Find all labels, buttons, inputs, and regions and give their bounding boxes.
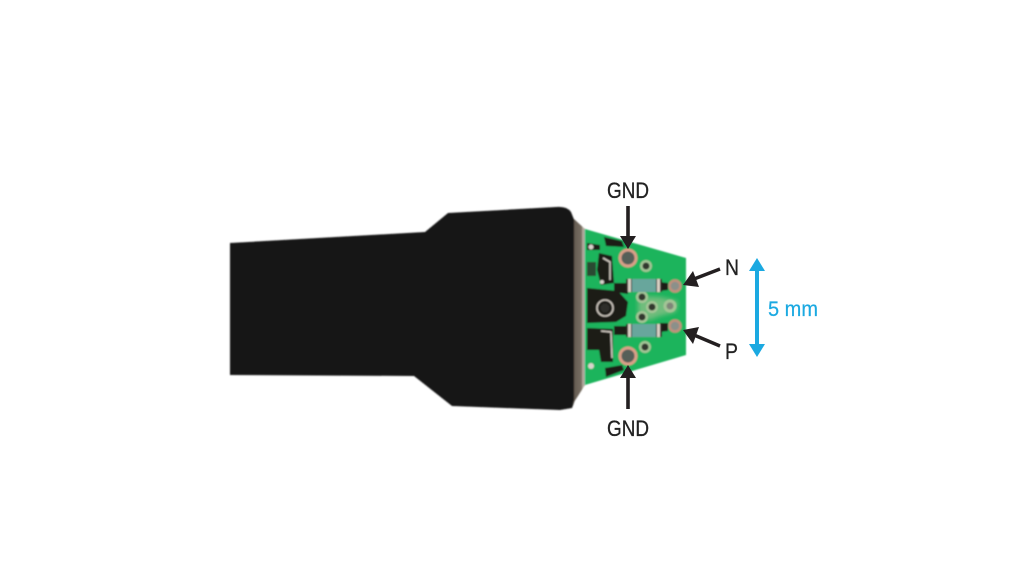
- metal collar: [572, 219, 585, 405]
- surface-mount components: [626, 279, 662, 337]
- black probe cable with heat-shrink sleeve: [230, 207, 585, 410]
- arrow: N: [683, 269, 720, 287]
- copper GND and signal pads: [620, 250, 680, 364]
- vias: [638, 262, 656, 350]
- label: 5 mm: 5 mm: [768, 298, 818, 321]
- label: N: N: [725, 255, 739, 280]
- label: P: P: [725, 339, 738, 364]
- light pads around the centre: [636, 260, 676, 353]
- arrow: GND top: [620, 206, 636, 249]
- arrow: P: [683, 327, 720, 346]
- label: GND top: GND: [607, 178, 649, 203]
- green circuit board: [585, 229, 686, 385]
- dark traces and solder: [587, 237, 668, 377]
- arrow: GND bottom: [620, 365, 636, 409]
- dimension arrow: 5 mm: [749, 258, 765, 357]
- label: GND bottom: GND: [607, 416, 649, 441]
- pale halo around centre vias: [638, 296, 678, 320]
- silver solder joints: [597, 258, 613, 358]
